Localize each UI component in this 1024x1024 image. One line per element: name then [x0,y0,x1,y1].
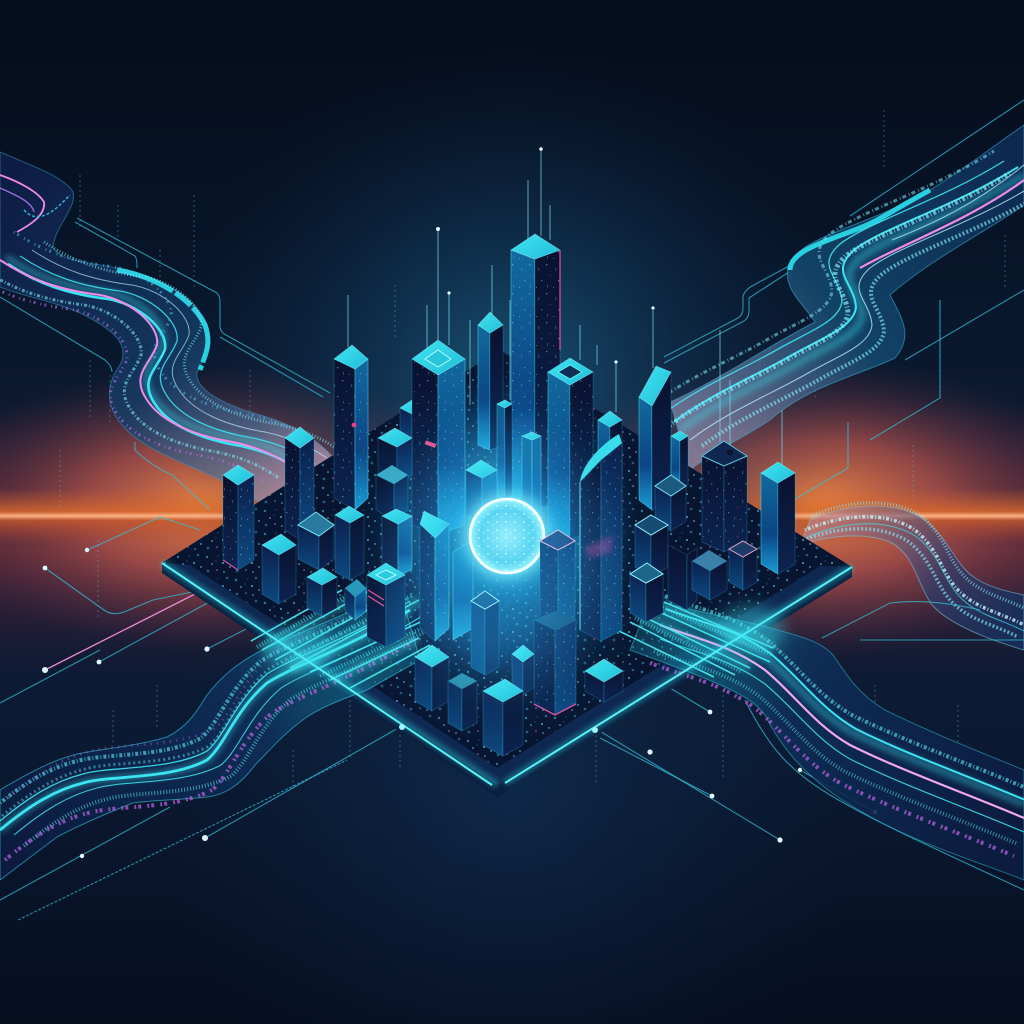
central glow [375,370,635,670]
center narrow tower [471,591,499,675]
small cube center [512,645,534,695]
left tower 1 [285,427,314,540]
slanted roof tower [639,366,671,510]
right cube 1 [692,550,727,600]
data stream right small [799,503,1024,650]
low cube right [585,659,623,702]
blue block behind orb [453,540,473,640]
right block back [655,475,686,531]
left tower 2 [223,465,254,570]
antennas [348,147,782,465]
glowing orb [435,464,579,608]
circuit lines upper left [0,218,330,510]
right cube 2 [729,541,757,590]
background vertical data ticks [60,110,1005,790]
left stacked block 2 [376,465,408,520]
slanted curved tower [580,434,622,641]
stacked tower upper [540,530,575,628]
screen glow over city [405,440,595,680]
low tower [415,645,449,711]
data stream lower right [630,595,1024,880]
tower lower left with pink [367,563,405,647]
small back tower right [598,411,622,480]
dark tower right [702,441,747,552]
platform base [162,350,852,797]
tower with framed roof [548,358,593,540]
circuit lines upper right [664,100,1024,502]
large tower left center [412,340,465,535]
narrow tower right [671,431,688,490]
back block left [400,400,424,450]
left block low [262,534,296,604]
data stream upper left [0,152,345,520]
mid tower behind [522,432,541,530]
left stacked block 1 [378,428,412,485]
data stream lower left [0,578,434,880]
left low cube [307,568,337,616]
small front block [448,673,477,731]
right block framed [635,515,668,577]
platform cyan rim lights [162,563,852,785]
left block tall [335,506,364,580]
stacked tower lower [534,611,576,715]
center block [466,460,497,520]
circuit lines lower right with nodes [598,602,1024,890]
translucent mid towers [497,400,512,500]
tallest central tower [511,234,560,510]
right cube framed [630,563,663,622]
small low block [345,579,366,620]
left block wide [298,512,334,570]
data stream upper right [650,125,1024,470]
circuit lines lower left with nodes [0,517,400,920]
front cube [483,679,523,756]
tower far left center [334,345,368,510]
center left block [382,509,412,577]
light bundles entering platform [251,585,773,688]
back tower [478,312,503,450]
city skyline [223,147,795,756]
far right tower [761,462,795,574]
dark block right [668,545,697,610]
tower front center left [420,511,449,641]
